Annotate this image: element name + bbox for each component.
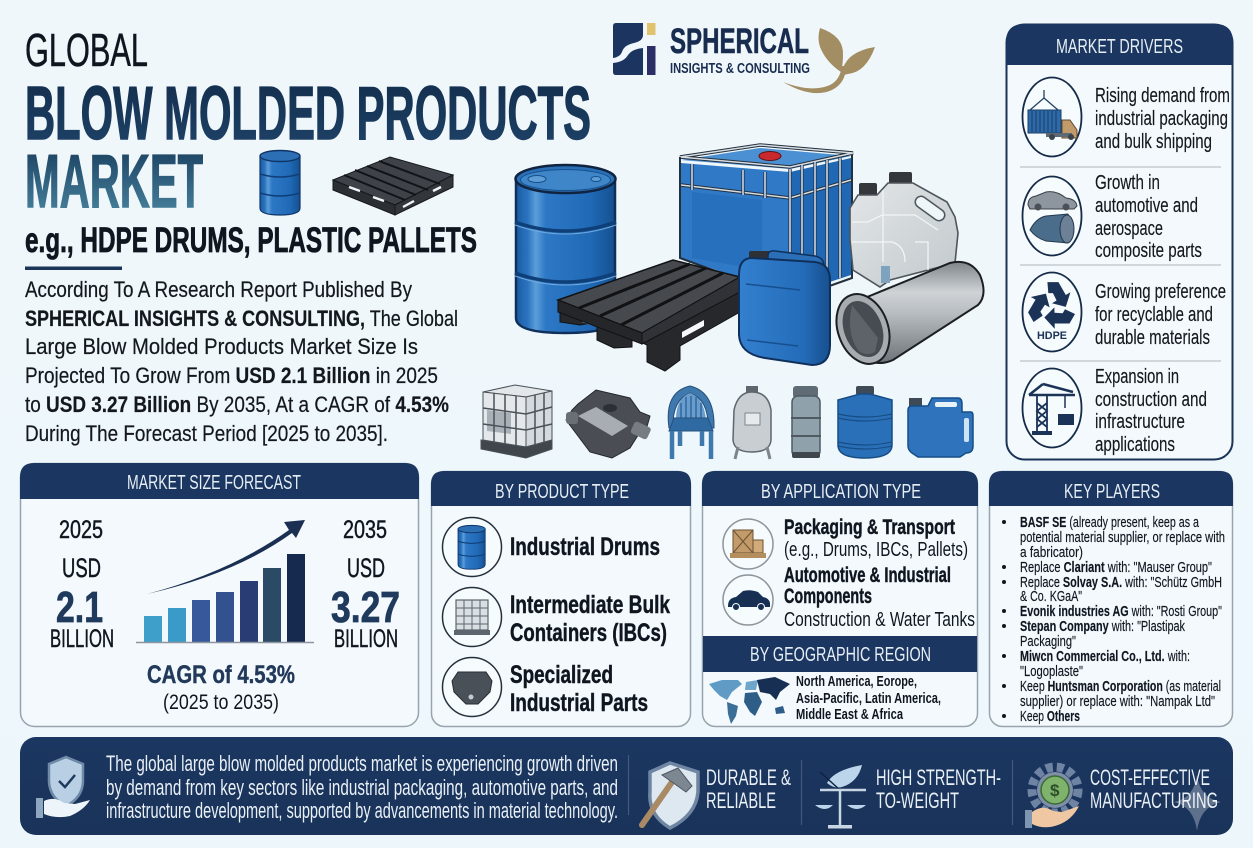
value: 2025: 2025 [59,516,103,544]
feature: cost effective manufacturing [1025,765,1218,828]
hero illustration: blow molded products [515,145,984,371]
list: companies: BASF SE (already present, keep as a [1020,515,1200,531]
list: companies: Stepan Company with: "Plastipak [1020,619,1186,635]
intro paragraph: Large Blow Molded Products Market Size Is [25,334,418,359]
value: 2025: 2.1 [56,583,103,632]
driver: recyclable materials [1022,272,1226,352]
heading: by product type: BY PRODUCT TYPE [495,481,629,503]
footer band [20,737,1233,835]
subtitle: e.g., HDPE DRUMS, PLASTIC PALLETS [25,221,477,260]
item: intermediate bulk containers: Containers (IBCs) [510,619,667,647]
list: companies: Evonik industries AG with: "Rosti Group" [1020,604,1222,620]
driver: recyclable materials: HDPE [1037,330,1067,342]
intro paragraph: Projected To Grow From USD 2.1 Billion in 2025 [25,363,438,388]
icon: world map [709,677,790,724]
icon: gas cylinder [791,386,821,458]
accent rule [25,266,122,270]
item: automotive and industrial components [723,564,951,625]
value: 2035: USD [347,553,385,583]
panel: key players [989,471,1233,726]
list: companies: "Logoplaste" [1020,664,1083,680]
text: summary: The global large blow molded products market is experiencing growth driven [106,751,618,776]
icon: plastic chair [668,386,714,459]
item: intermediate bulk containers [442,588,670,647]
driver: automotive and aerospace: aerospace [1095,217,1163,240]
icon: small blue drum [260,150,300,215]
subheader: by geographic region: BY GEOGRAPHIC REGION [750,644,931,666]
value: 2025: USD [62,553,101,583]
bar chart [136,520,314,642]
driver: construction and infrastructure: applications [1095,433,1175,456]
value: 2035: 3.27 [331,583,400,632]
text: summary [106,751,618,823]
heading: market drivers: MARKET DRIVERS [1056,36,1183,58]
watermark: sparkle [1174,775,1221,831]
IBC tote [680,145,853,300]
logo tagline: INSIGHTS & CONSULTING [670,61,810,77]
small products row [481,385,973,459]
grey jug [850,172,958,287]
text: regions [796,674,941,723]
black pallet [558,260,740,371]
text: regions: Asia-Pacific, Latin America, [796,691,941,707]
intro paragraph [25,277,458,446]
item: automotive and industrial components: Components [784,585,872,608]
item: industrial drums: Industrial Drums [510,533,660,561]
list: companies: & Co. KGaA" [1020,589,1082,605]
driver: packaging and shipping [1022,78,1230,156]
item: specialized industrial parts: Specialized [510,661,613,689]
driver: automotive and aerospace [1022,171,1202,262]
icon: blue water tank [838,386,892,458]
item: construction and water tanks: Construction & Water Tanks [784,609,975,631]
driver: construction and infrastructure: Expansion in [1095,365,1179,388]
feature: high strength to weight: HIGH STRENGTH- [876,765,1001,790]
driver: construction and infrastructure: construction and [1095,388,1207,411]
callout: CAGR: (2025 to 2035) [163,691,279,714]
grey pipe [827,262,984,371]
icon: silver tank [733,386,771,459]
icon: shield on hand [36,757,90,818]
feature: durable and reliable [642,763,791,828]
feature: high strength to weight [815,765,1001,828]
arrow: growth [147,520,305,594]
value: 2025: BILLION [50,625,114,653]
driver: packaging and shipping: and bulk shipping [1095,130,1212,153]
driver: automotive and aerospace: Growth in [1095,171,1160,194]
title: GLOBAL: GLOBAL [25,24,148,76]
panel: by product type [431,471,691,726]
value: 2035: BILLION [334,625,398,653]
driver: recyclable materials: for recyclable and [1095,303,1213,326]
text: summary: by demand from key sectors like industrial packaging, automotive parts, and [106,775,618,800]
intro paragraph: During The Forecast Period [2025 to 2035]. [25,421,388,446]
value: 2035: 2035 [343,516,387,544]
logo mark [613,23,656,75]
icon: small black pallet [333,157,453,215]
heading: by application type: BY APPLICATION TYPE [761,481,921,503]
item: packaging and transport: (e.g., Drums, IBCs, Pallets) [784,539,968,561]
panel: market size forecast [20,463,419,726]
driver: automotive and aerospace: composite parts [1095,239,1202,262]
value: 2025 [50,516,114,653]
driver: recyclable materials: durable materials [1095,326,1210,349]
heading: key players: KEY PLAYERS [1064,481,1160,503]
icon: caged IBC [481,385,552,458]
logo wordmark: SPHERICAL [670,22,809,61]
item: industrial drums [442,518,660,576]
feature: durable and reliable: RELIABLE [706,788,776,813]
feature: cost effective manufacturing: $ [1050,781,1060,800]
text: regions: North America, Eorope, [796,674,917,690]
list: companies: a fabricator) [1020,545,1083,561]
text: summary: infrastructure development, supported by advancements in material technology. [106,798,618,823]
list: companies: Keep Others [1020,709,1080,725]
driver: automotive and aerospace: automotive and [1095,194,1198,217]
driver: construction and infrastructure [1022,365,1207,456]
item: specialized industrial parts [442,658,648,717]
icon: blue jerry can [908,398,973,457]
item: automotive and industrial components: Automotive & Industrial [784,564,951,587]
callout: CAGR: CAGR of 4.53% [147,661,295,689]
driver: construction and infrastructure: infrastructure [1095,410,1185,433]
title: MARKET: MARKET [25,139,203,223]
feature: durable and reliable: DURABLE & [706,765,791,790]
blue canister [739,251,830,365]
panel: market drivers [1006,24,1233,460]
title block [25,24,591,260]
feature: high strength to weight: TO-WEIGHT [876,788,959,813]
callout: CAGR [147,661,295,714]
list: companies: Replace Clariant with: "Mauser Group" [1020,560,1212,576]
logo: Spherical Insights & Consulting [613,22,875,93]
heading: market size forecast: MARKET SIZE FORECAST [127,472,301,494]
logo leaves [783,28,875,93]
text: regions: Middle East & Africa [796,707,904,723]
item: specialized industrial parts: Industrial Parts [510,689,648,717]
list: companies: Replace Solvay S.A. with: "Schütz GmbH [1020,575,1222,591]
list: companies: Packaging" [1020,634,1076,650]
value: 2035 [331,516,400,653]
list: companies [1002,515,1225,725]
item: packaging and transport [723,516,968,569]
item: intermediate bulk containers: Intermediate Bulk [510,591,670,619]
title: BLOW MOLDED PRODUCTS: BLOW MOLDED PRODUCTS [25,71,591,155]
subheader: by geographic region [703,636,977,672]
intro paragraph: to USD 3.27 Billion By 2035, At a CAGR of 4.53% [25,392,449,417]
list: companies: Miwcn Commercial Co., Ltd. with: [1020,649,1190,665]
intro paragraph: According To A Research Report Published By [25,277,412,302]
panel: by application type [702,471,978,726]
icon: engine part [566,390,652,458]
intro paragraph: SPHERICAL INSIGHTS & CONSULTING, The Global [25,306,458,331]
blue drum [515,165,616,333]
list: companies: Keep Huntsman Corporation (as material [1020,679,1221,695]
item: packaging and transport: Packaging & Transport [784,516,955,539]
